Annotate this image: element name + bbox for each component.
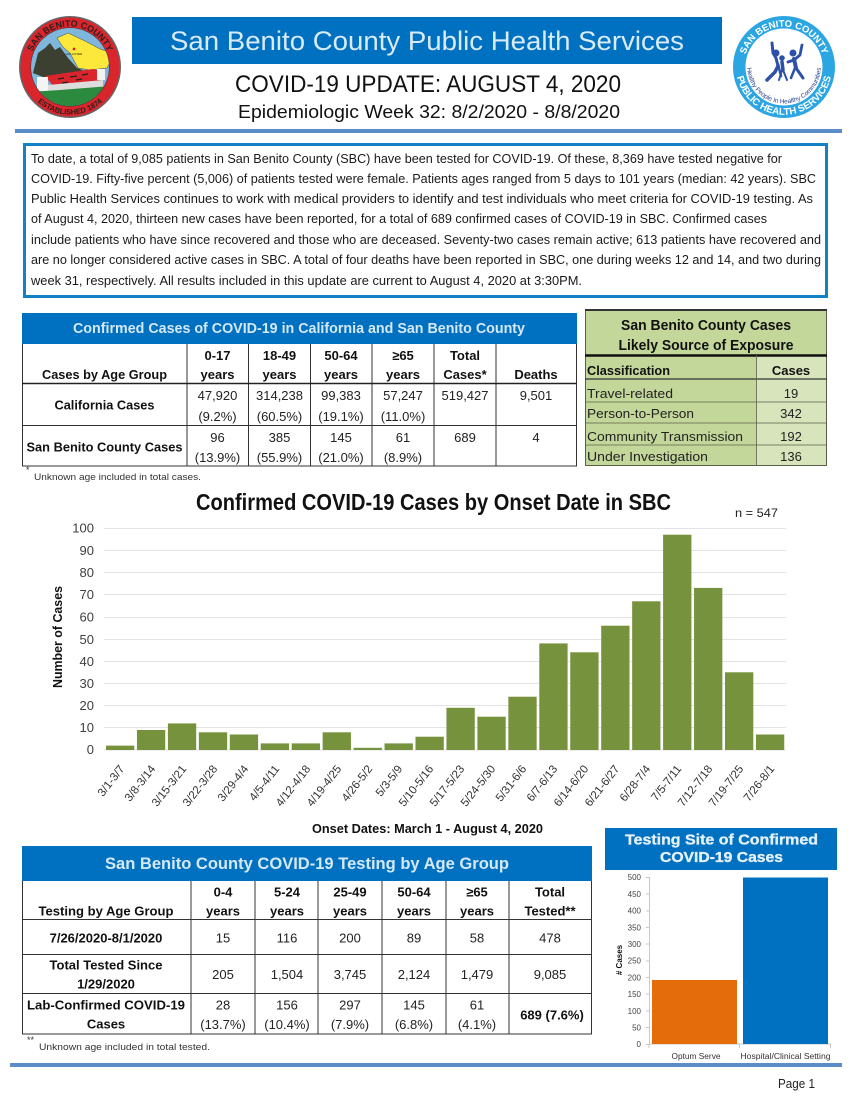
panel: testing by age group table: years — [460, 904, 494, 918]
panel: summary text: of August 4, 2020, thirteen new cases have been reported, for a total of 689 confirmed cases of COVID-19 in SBC. Confirmed cases — [31, 212, 767, 226]
testing site title — [625, 832, 818, 866]
heading: epidemiologic week: Epidemiologic Week 32: 8/2/2020 - 8/8/2020 — [238, 102, 620, 122]
y axis labels: 70 — [80, 587, 94, 602]
panel: confirmed cases table: years — [201, 367, 234, 382]
x axis labels — [96, 763, 777, 809]
exposure table title: San Benito County Cases — [621, 318, 791, 334]
panel: confirmed cases table: Cases* — [443, 367, 488, 382]
panel: confirmed cases table: 9,501 — [520, 388, 552, 403]
panel: testing by age group table: 0-4 — [214, 884, 233, 900]
logo: Public Health Services: PUBLIC HEALTH SERVICES — [737, 76, 830, 115]
testing site title: COVID-19 Cases — [660, 850, 783, 866]
panel: confirmed cases table: years — [386, 367, 420, 382]
panel: testing by age group table: Tested** — [524, 904, 576, 918]
x axis labels: 4/19-4/25 — [305, 763, 344, 809]
x axis labels: 3/29-4/4 — [216, 763, 252, 804]
panel: likely source of exposure table: Under Investigation — [587, 449, 708, 464]
y axis title: # Cases — [615, 944, 624, 975]
panel: testing by age group table: 7/26/2020-8/1/2020 — [50, 930, 162, 946]
panel: confirmed cases table: 0-17 — [204, 348, 231, 363]
y axis labels: 90 — [80, 543, 94, 558]
panel: confirmed cases table: (60.5%) — [257, 409, 302, 424]
y axis ticks: 100 — [628, 1007, 642, 1016]
panel: testing by age group table: (7.9%) — [331, 1017, 369, 1032]
y axis labels: 20 — [80, 698, 94, 713]
logo: Public Health Services: Healthy People In Healthy Communities — [747, 68, 821, 104]
bars — [106, 535, 784, 750]
footer rule — [10, 1063, 842, 1067]
panel: testing by age group table: 25-49 — [333, 884, 367, 900]
panel: confirmed cases table: (8.9%) — [384, 450, 422, 465]
bar chart: cases by onset date — [50, 520, 786, 836]
panel: testing by age group table: years — [333, 904, 367, 918]
y axis labels: 60 — [80, 610, 94, 624]
panel: confirmed cases table — [22, 313, 577, 466]
panel: confirmed cases table: San Benito County Cases — [26, 440, 182, 454]
panel: testing by age group table: Cases — [87, 1016, 125, 1032]
x axis labels: 3/8-3/14 — [123, 763, 159, 804]
footnote: testing table — [27, 1035, 210, 1053]
sample size note: n = 547 — [735, 506, 778, 520]
panel: likely source of exposure table: Travel-related — [587, 386, 673, 401]
panel: testing by age group table: 9,085 — [534, 967, 566, 982]
panel: testing by age group table: Testing by Age Group — [38, 904, 174, 918]
panel: likely source of exposure table: 19 — [784, 386, 798, 401]
x axis labels: 6/28-7/4 — [618, 763, 654, 804]
panel: confirmed cases table: 96 — [210, 430, 225, 445]
panel: testing by age group table: years — [270, 904, 304, 918]
panel: testing by age group table: ≥65 — [466, 884, 488, 900]
label: Hospital/Clinical Setting: Hospital/Clinical Setting — [740, 1052, 830, 1061]
panel: testing by age group table: 89 — [407, 930, 421, 946]
panel: confirmed cases table: (19.1%) — [318, 409, 364, 424]
panel: testing by age group table: 61 — [470, 998, 484, 1012]
y axis ticks: 0 — [637, 1040, 642, 1049]
x axis labels: 3/1-3/7 — [96, 763, 127, 799]
y axis labels: 0 — [87, 742, 94, 757]
panel: confirmed cases table: 99,383 — [321, 388, 361, 403]
title banner — [132, 17, 722, 64]
panel: confirmed cases table: 50-64 — [324, 348, 358, 363]
y axis ticks: 400 — [628, 906, 642, 916]
x axis labels: 6/21-6/27 — [583, 763, 622, 809]
panel: testing by age group table: (10.4%) — [264, 1017, 310, 1032]
panel: confirmed cases table: 689 — [454, 430, 476, 445]
panel: confirmed cases table: Deaths — [514, 367, 558, 382]
x axis labels: 6/14-6/20 — [552, 763, 591, 809]
panel: confirmed cases table: California Cases — [54, 398, 154, 412]
logo: Public Health Services: SAN BENITO COUNTY — [740, 20, 828, 54]
panel: testing by age group table: 15 — [216, 930, 230, 946]
footnote: testing table: ** — [27, 1035, 35, 1045]
panel: testing by age group table: 145 — [403, 998, 425, 1012]
y axis labels: 50 — [80, 632, 94, 647]
panel: testing by age group table — [22, 846, 592, 1034]
x axis labels: 6/7-6/13 — [525, 763, 560, 804]
panel: confirmed cases table: 385 — [269, 430, 290, 445]
y axis title: Number of Cases — [50, 586, 65, 688]
x axis labels: 5/31-6/6 — [494, 763, 529, 804]
panel: testing by age group table: (13.7%) — [200, 1017, 246, 1032]
table title: Confirmed Cases of COVID-19 in California and San Benito County — [73, 321, 525, 337]
logo: San Benito County seal — [19, 16, 121, 118]
x axis labels: 3/15-3/21 — [150, 763, 189, 809]
testing site title: Testing Site of Confirmed — [625, 832, 818, 848]
y axis ticks: 350 — [628, 924, 642, 932]
panel: testing by age group table: 478 — [539, 930, 561, 946]
panel: testing by age group table: Lab-Confirmed COVID-19 — [27, 998, 185, 1012]
logo: San Benito County seal: HOLLISTER — [66, 52, 83, 56]
y axis labels: 30 — [80, 676, 94, 691]
panel: testing by age group table: 116 — [277, 930, 297, 946]
testing table title: San Benito County COVID-19 Testing by Age Group — [105, 854, 509, 873]
panel: confirmed cases table: 4 — [532, 430, 540, 445]
x axis title: Onset Dates: March 1 - August 4, 2020 — [312, 822, 543, 836]
panel: testing by age group table: years — [206, 904, 240, 918]
panel: testing by age group table: 58 — [470, 930, 484, 946]
panel: confirmed cases table: Total — [450, 348, 480, 363]
panel: likely source of exposure table: 136 — [780, 449, 802, 464]
bar: Optum Serve — [652, 980, 737, 1044]
panel: confirmed cases table: ≥65 — [392, 348, 414, 363]
x axis labels: 4/26-5/2 — [340, 763, 375, 804]
panel: likely source of exposure table: Classification — [587, 363, 670, 378]
panel: testing by age group table: 5-24 — [274, 884, 301, 900]
panel: confirmed cases table: (55.9%) — [257, 450, 302, 465]
page number: Page 1 — [778, 1077, 815, 1091]
footnote: cases table: * — [26, 465, 30, 475]
panel: testing by age group table: 1,479 — [461, 967, 493, 982]
panel: likely source of exposure table: Person-to-Person — [587, 406, 694, 421]
panel: likely source of exposure table — [585, 309, 827, 466]
panel: testing by age group table: 689 (7.6%) — [520, 1008, 584, 1022]
y axis labels: 100 — [72, 520, 94, 536]
panel: testing by age group table: 1,504 — [271, 967, 303, 982]
y axis ticks: 200 — [628, 974, 642, 982]
panel: confirmed cases table: years — [324, 367, 358, 382]
panel: testing by age group table: 50-64 — [397, 884, 431, 900]
panel: confirmed cases table: 18-49 — [263, 348, 296, 363]
panel: confirmed cases table: (9.2%) — [198, 409, 237, 424]
y axis ticks — [628, 873, 642, 1049]
x axis labels: 7/5-7/11 — [649, 763, 684, 803]
panel: likely source of exposure table: Community Transmission — [587, 429, 743, 444]
y axis ticks: 50 — [632, 1024, 642, 1032]
x axis labels: 5/24-5/30 — [459, 763, 498, 809]
panel: summary text — [24, 144, 826, 296]
panel: confirmed cases table: (13.9%) — [195, 450, 240, 465]
logo: San Benito County seal: SAN BENITO COUNTY — [28, 20, 114, 51]
y axis labels: 80 — [80, 565, 94, 580]
panel: testing by age group table: 1/29/2020 — [77, 976, 135, 992]
panel: summary text: week 31, respectively. All results included in this update are current to August 4, 2020 at 3:30PM. — [30, 274, 582, 288]
y axis ticks: 500 — [628, 873, 642, 882]
panel: testing by age group table: (6.8%) — [395, 1017, 433, 1032]
panel: testing by age group table: 156 — [276, 998, 298, 1012]
panel: testing by age group table: 28 — [216, 998, 230, 1012]
x axis labels: 7/26-8/1 — [742, 763, 777, 804]
heading: update date: COVID-19 UPDATE: AUGUST 4, 2020 — [235, 71, 621, 98]
header rule — [15, 129, 842, 133]
panel: confirmed cases table: 57,247 — [383, 388, 423, 403]
x axis labels: 5/17-5/23 — [428, 763, 467, 809]
footnote: cases table — [26, 465, 201, 483]
x axis labels: 7/12-7/18 — [676, 763, 715, 809]
y axis labels — [72, 520, 94, 757]
panel: testing site chart — [605, 828, 837, 1061]
y axis ticks: 250 — [628, 956, 642, 966]
logo: Public Health Services — [733, 16, 835, 118]
panel: testing by age group table: Total Tested Since — [50, 958, 162, 972]
panel: confirmed cases table: Cases by Age Group — [42, 367, 167, 382]
panel: testing by age group table: Total — [535, 884, 565, 900]
panel: confirmed cases table: (21.0%) — [318, 450, 364, 465]
x axis labels: 5/10-5/16 — [397, 763, 436, 809]
label: Optum Serve: Optum Serve — [672, 1052, 721, 1061]
y axis labels: 10 — [80, 720, 94, 735]
panel: likely source of exposure table: 192 — [780, 429, 802, 444]
x axis labels: 4/5-4/11 — [247, 763, 282, 803]
panel: summary text: To date, a total of 9,085 patients in San Benito County (SBC) have been tested for COVID-19. Of these, 8,369 have tested negative for — [31, 152, 782, 166]
panel: confirmed cases table: 145 — [330, 430, 352, 445]
y axis ticks: 450 — [628, 890, 642, 899]
panel: testing by age group table: 3,745 — [334, 967, 366, 982]
y axis ticks: 300 — [628, 940, 642, 949]
y axis labels: 40 — [80, 654, 94, 669]
panel: likely source of exposure table: 342 — [780, 406, 802, 421]
y axis ticks: 150 — [628, 990, 642, 999]
x axis labels: 4/12-4/18 — [274, 763, 313, 809]
footnote: cases table: Unknown age included in total cases. — [34, 472, 201, 483]
panel: testing by age group table: years — [397, 904, 431, 918]
footnote: testing table: Unknown age included in total tested. — [39, 1042, 210, 1053]
exposure table title: Likely Source of Exposure — [618, 338, 794, 354]
panel: summary text: COVID-19. Fifty-five percent (5,006) of patients tested were female. Patients ages ranged from 5 days to 101 years (median: 42 years). SBC — [31, 172, 816, 186]
panel: testing by age group table: 297 — [339, 998, 361, 1012]
panel: confirmed cases table: 61 — [396, 430, 410, 445]
panel: likely source of exposure table: Cases — [772, 363, 810, 378]
panel: confirmed cases table: 519,427 — [442, 388, 488, 403]
panel: testing by age group table: (4.1%) — [458, 1017, 496, 1032]
panel: testing by age group table: 2,124 — [398, 967, 430, 982]
panel: testing by age group table: 205 — [212, 967, 234, 982]
panel: summary text: Public Health Services continues to work with medical providers to identify and test individuals who meet criteria for COVID-19 testing. As — [31, 192, 813, 206]
x axis labels: 3/22-3/28 — [181, 763, 220, 809]
panel: confirmed cases table: years — [263, 367, 296, 382]
x axis labels: 5/3-5/9 — [374, 763, 405, 799]
exposure table title — [618, 318, 794, 354]
panel: confirmed cases table: (11.0%) — [381, 409, 425, 424]
x axis labels: 7/19-7/25 — [707, 763, 746, 809]
logo: San Benito County seal: ESTABLISHED 1874 — [38, 98, 102, 115]
panel: confirmed cases table: 47,920 — [198, 388, 237, 403]
panel: summary text: include patients who have since recovered and those who are deceased. Seventy-two cases remain active; 613 patients have recovered and — [31, 233, 821, 247]
panel: testing by age group table: 200 — [339, 930, 361, 946]
bar: Hospital/Clinical Setting — [743, 878, 828, 1044]
panel: summary text: are no longer considered active cases in SBC. A total of four deaths have been reported in SBC, one during weeks 12 and 14, and two during — [31, 253, 821, 267]
panel: confirmed cases table: 314,238 — [256, 388, 303, 403]
title banner: San Benito County Public Health Services — [170, 26, 684, 56]
chart title: Confirmed COVID-19 Cases by Onset Date in SBC — [196, 489, 671, 515]
